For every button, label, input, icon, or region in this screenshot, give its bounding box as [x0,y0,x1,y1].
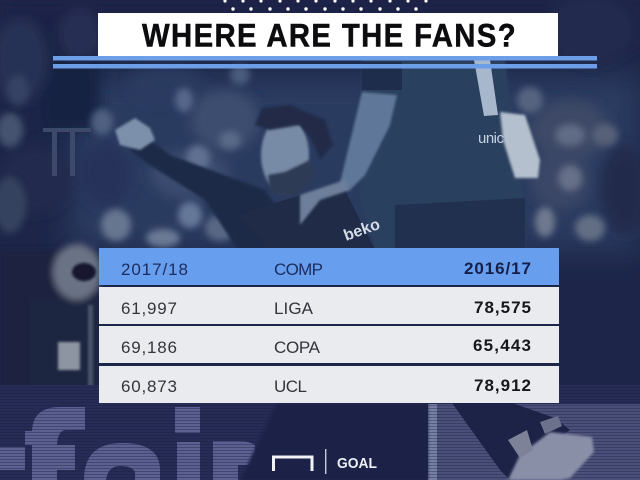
table row: UCL: 60,873 [121,377,177,396]
GOAL logo: GOAL [337,456,377,472]
player on right: unic [478,130,504,147]
photographer [0,244,101,400]
table header row [99,248,559,285]
table row: Copa: 65,443 [473,336,531,355]
title: WHERE ARE THE FANS? [142,18,517,54]
photo background: bottom advertising board [0,385,640,480]
GOAL logo [274,449,377,474]
board lettering fragments [0,407,255,480]
icon: goal frame [274,457,312,471]
table row: Copa: COPA [274,338,321,357]
player on right [340,60,540,250]
table row: Liga: 61,997 [121,299,177,318]
blue double rule under title [53,56,597,68]
table row: Copa: 69,186 [121,338,177,357]
dotted decoration above title [223,0,428,11]
crowd faces [91,109,113,135]
player in centre [115,105,383,250]
table header row: 2017/18 [121,260,188,279]
table row: Liga: LIGA [274,299,314,318]
table header row: 2016/17 [464,259,531,278]
table row: Liga [99,287,559,324]
attendance table [99,248,559,403]
table row: Liga: 78,575 [474,298,531,317]
table row: Copa [99,326,559,363]
table header row: COMP [274,260,323,279]
crowd barrier [43,128,91,176]
table row: UCL: 78,912 [474,376,531,395]
table row: UCL [99,366,559,403]
player legs and boots [240,403,594,480]
player in centre: beko [342,216,383,245]
table row: UCL: UCL [274,377,307,396]
